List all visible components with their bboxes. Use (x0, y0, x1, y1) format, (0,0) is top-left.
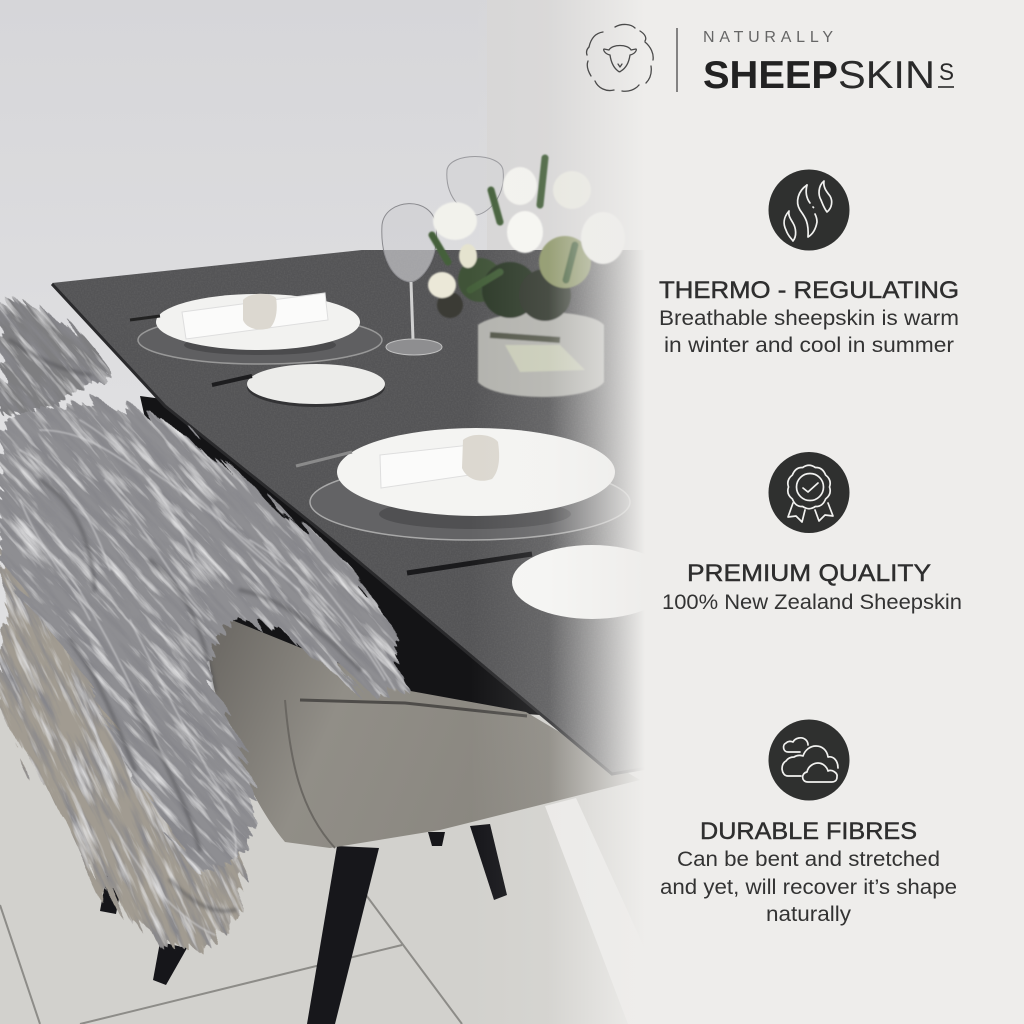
body text (660, 847, 957, 926)
logo divider (676, 28, 678, 92)
sheepskin: beige underside (0, 447, 400, 1024)
icon: clouds (768, 720, 850, 800)
logo (587, 24, 954, 97)
logo icon: sheep in cloud (587, 24, 653, 91)
body text (659, 306, 959, 357)
logo wordmark: NATURALLY (703, 29, 833, 46)
place setting: back plates (130, 293, 385, 407)
icon: rosette (768, 452, 850, 533)
feature: durable fibres (660, 720, 957, 926)
chair rear legs (100, 824, 507, 985)
logo wordmark: SKIN (838, 54, 935, 97)
place setting: front plates (296, 428, 672, 619)
vase and flowers (428, 158, 625, 397)
heading: THERMO - REGULATING (659, 277, 959, 304)
feature: thermo-regulating (659, 170, 959, 357)
logo wordmark (703, 29, 954, 97)
logo wordmark: SHEEP (703, 54, 838, 97)
feature: premium quality (662, 452, 962, 614)
body text: in winter and cool in summer (664, 333, 954, 357)
icon: steam (768, 170, 850, 250)
body text: Can be bent and stretched (677, 847, 940, 871)
wine glasses (382, 156, 503, 355)
right panel background (645, 0, 1024, 1024)
chair front leg (307, 846, 379, 1024)
body text: and yet, will recover it’s shape (660, 875, 957, 899)
side wall (487, 0, 657, 420)
body text: 100% New Zealand Sheepskin (662, 590, 962, 614)
table leg (545, 798, 650, 1024)
white fade to right panel (470, 0, 645, 1024)
floor (0, 690, 660, 1024)
sheepskin: rear (0, 244, 169, 471)
table top (52, 250, 660, 774)
fur shadows (10, 340, 360, 911)
chair body (208, 612, 640, 848)
fur strands (20, 420, 395, 935)
shadow under table (140, 396, 540, 715)
heading: PREMIUM QUALITY (687, 560, 931, 587)
back wall (0, 0, 490, 720)
body text: naturally (766, 902, 851, 926)
logo wordmark: S (939, 59, 954, 86)
heading: DURABLE FIBRES (700, 818, 917, 845)
sheepskin: grey front (0, 202, 636, 1024)
body text: Breathable sheepskin is warm (659, 306, 959, 330)
